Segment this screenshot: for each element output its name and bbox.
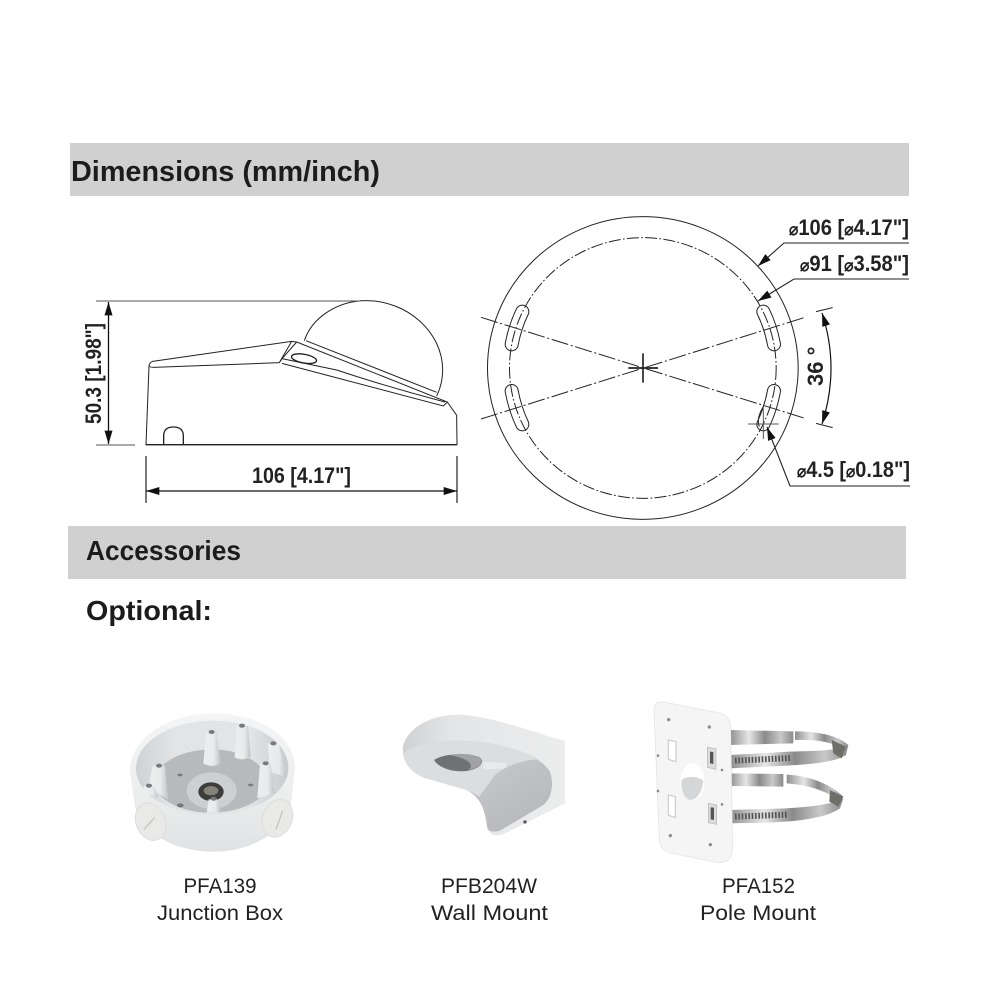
heading bar: accessories: Accessories [86, 535, 241, 566]
caption: wall mount [431, 875, 548, 925]
caption: pole mount: PFA152 [722, 875, 795, 898]
product image: wall mount [403, 715, 565, 835]
heading bar: accessories [68, 526, 906, 579]
heading bar: dimensions [70, 143, 909, 196]
side view drawing [96, 301, 457, 503]
product image: junction box [130, 713, 298, 852]
mounting slots [512, 312, 774, 424]
side caps [130, 798, 172, 845]
caption: junction box: Junction Box [157, 902, 284, 925]
dimension label: width: 106 [4.17"] [252, 463, 351, 488]
angle arc [816, 308, 833, 428]
caption: junction box [157, 875, 284, 925]
caption: pole mount: Pole Mount [700, 902, 816, 925]
dimension label: angle: 36 ° [803, 347, 828, 386]
caption: pole mount [700, 875, 816, 925]
plate [654, 702, 733, 863]
dimension label: bolt circle diameter: ⌀91 [⌀3.58"] [800, 251, 909, 276]
outer circle [487, 217, 798, 519]
caption: wall mount: Wall Mount [431, 902, 548, 925]
caption: junction box: PFA139 [184, 875, 256, 898]
heading bar: dimensions: Dimensions (mm/inch) [71, 156, 380, 188]
product image: pole mount [654, 702, 848, 863]
mounting posts [143, 726, 287, 813]
top view drawing [481, 217, 910, 519]
dimension label: outer diameter: ⌀106 [⌀4.17"] [789, 215, 909, 240]
subheading: optional: Optional: [86, 595, 212, 626]
centre lines [481, 317, 805, 419]
steel bands [730, 730, 848, 823]
bolt circle [509, 238, 776, 498]
dimension label: height: 50.3 [1.98"] [81, 323, 106, 424]
dimension label: hole diameter: ⌀4.5 [⌀0.18"] [797, 457, 910, 482]
caption: wall mount: PFB204W [441, 875, 537, 898]
